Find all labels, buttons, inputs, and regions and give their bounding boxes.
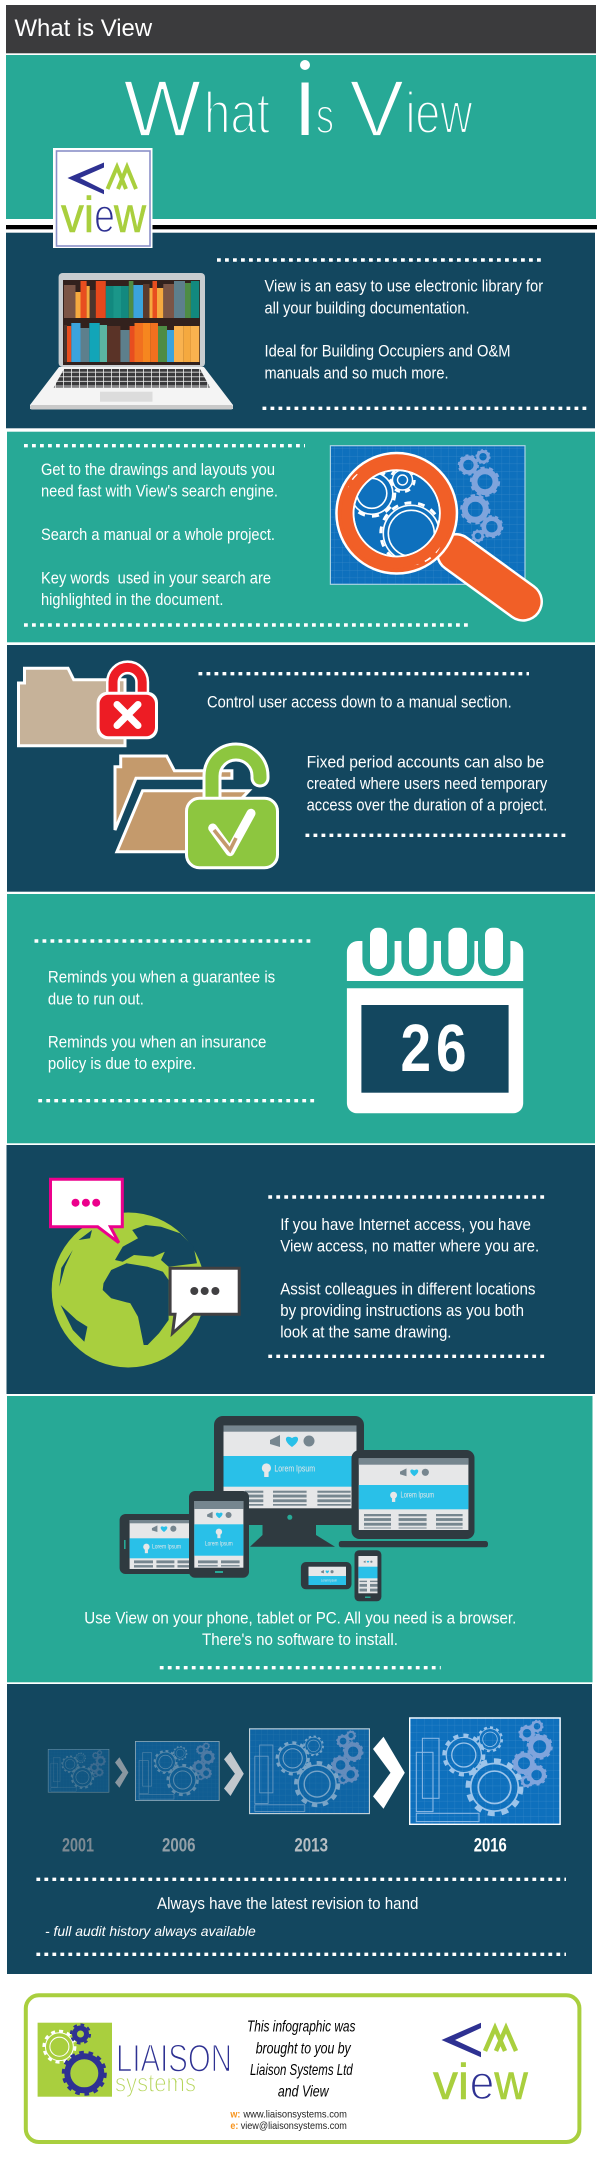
text block: credit: brought to you by: [256, 2040, 351, 2057]
text block: intro: [264, 277, 543, 382]
text block: latest revision: [45, 1894, 418, 1939]
panel: access control: [7, 645, 595, 892]
icon: desktop monitor: [214, 1416, 364, 1547]
text block: search: need fast with View's search engine.: [41, 482, 278, 501]
text block: search: highlighted in the document.: [41, 590, 223, 609]
text block: reminders: Reminds you when an insurance: [48, 1032, 266, 1051]
text block: latest revision: Always have the latest revision to hand: [157, 1894, 418, 1913]
heading: What Is View: hat: [204, 81, 270, 146]
text block: reminders: Reminds you when a guarantee is: [48, 968, 275, 987]
blueprint 2006: [135, 1741, 220, 1801]
text block: reminders: [48, 968, 275, 1073]
text block: latest revision: - full audit history always available: [45, 1923, 256, 1939]
text block: devices: There's no software to install.: [202, 1630, 398, 1649]
text block: search: Key words used in your search are: [41, 568, 271, 587]
panel: reminders: [7, 894, 595, 1143]
top title bar: [6, 5, 596, 53]
blueprint 2001: [48, 1749, 109, 1793]
year labels: 2016: [474, 1836, 507, 1857]
text block: internet access: Assist colleagues in different locations: [280, 1279, 536, 1298]
text block: access: created where users need temporary: [307, 774, 548, 793]
icon: pink speech bubble: [50, 1179, 122, 1243]
year labels: 2006: [162, 1836, 196, 1857]
arrow 2: [224, 1752, 244, 1796]
icon: locked folder: [18, 667, 158, 746]
icon: portrait phone: [354, 1550, 381, 1601]
heading: What Is View: s: [316, 88, 334, 144]
text block: credit: This infographic was: [247, 2019, 356, 2036]
text block: credit: Liaison Systems Ltd: [250, 2062, 353, 2079]
text block: access: Control user access down to a manual section.: [207, 693, 512, 712]
icon: laptop device: Lorem Ipsum: [400, 1490, 434, 1499]
icon: dark speech bubble: [170, 1268, 239, 1333]
text block: intro: Ideal for Building Occupiers and O&M: [264, 342, 510, 361]
text block: access: [207, 693, 548, 815]
logo: View: e: [470, 2057, 494, 2110]
icon: blueprint with magnifying glass: [330, 446, 525, 602]
logo: Liaison Systems: [38, 2023, 232, 2098]
text block: access: access over the duration of a project.: [307, 796, 547, 815]
icon: desktop monitor: Lorem Ipsum: [274, 1464, 315, 1475]
text block: access: Fixed period accounts can also be: [307, 752, 544, 771]
text block: reminders: due to run out.: [48, 989, 144, 1008]
panel: anywhere access: [6, 1145, 595, 1394]
blueprint 2013: [249, 1728, 370, 1814]
text block: internet access: by providing instructions as you both: [280, 1301, 524, 1320]
panel: footer: [26, 1995, 579, 2142]
text block: search: Search a manual or a whole project.: [41, 525, 275, 544]
logo: View badge: e: [94, 190, 115, 243]
text block: intro: all your building documentation.: [264, 298, 470, 317]
panel: revisions: [7, 1684, 592, 1974]
top title bar: What is View: [14, 15, 153, 42]
text block: intro: View is an easy to use electronic library for: [264, 277, 543, 296]
text block: reminders: policy is due to expire.: [48, 1054, 196, 1073]
arrow 1: [115, 1757, 128, 1788]
heading: What Is View: W: [124, 64, 201, 153]
logo: View badge: vi: [61, 187, 94, 243]
text block: internet access: If you have Internet access, you have: [280, 1215, 531, 1234]
text block: contact details: view@liaisonsystems.com: [241, 2120, 347, 2132]
logo: View: w: [493, 2054, 529, 2110]
icon: landscape tablet: Lorem Ipsum: [152, 1544, 181, 1551]
heading: What Is View: V: [350, 64, 405, 153]
text block: credit: [247, 2019, 356, 2101]
logo: View: [433, 2023, 529, 2110]
panel: devices: [7, 1396, 592, 1682]
year labels: 2001: [62, 1836, 94, 1857]
icon: laptop device: [339, 1450, 488, 1547]
text block: contact details: w:: [230, 2108, 240, 2120]
icon: landscape tablet: [120, 1514, 195, 1574]
logo: View badge: [53, 148, 152, 248]
icon: calendar: [347, 925, 523, 1113]
icon: portrait tablet: Lorem Ipsum: [205, 1541, 233, 1548]
icon: portrait tablet: [189, 1491, 249, 1578]
logo: View badge: w: [113, 187, 147, 243]
icon: landscape phone: [301, 1562, 352, 1589]
logo: Liaison Systems: LIAISON: [116, 2038, 232, 2081]
icon: landscape phone: Lorem Ipsum: [321, 1578, 337, 1582]
text block: devices: [84, 1608, 516, 1649]
icon: unlocked folder: [115, 752, 278, 868]
text block: contact details: e:: [230, 2120, 238, 2132]
year labels: 2013: [294, 1836, 328, 1857]
icon: calendar: 26: [400, 1011, 471, 1085]
text block: search: Get to the drawings and layouts you: [41, 460, 275, 479]
year labels: [62, 1836, 507, 1857]
text block: devices: Use View on your phone, tablet or PC. All you need is a browser.: [84, 1608, 516, 1627]
text block: credit: and View: [278, 2084, 330, 2101]
heading: What Is View: I: [294, 67, 316, 152]
text block: search: [41, 460, 278, 609]
text block: internet access: [280, 1215, 539, 1342]
heading: What Is View: iew: [406, 81, 473, 146]
text block: internet access: View access, no matter where you are.: [280, 1237, 539, 1256]
logo: Liaison Systems: systems: [115, 2068, 196, 2098]
text block: contact details: [230, 2108, 347, 2132]
text block: contact details: www.liaisonsystems.com: [243, 2108, 347, 2120]
heading: What Is View: [124, 60, 473, 153]
panel: header: [6, 55, 596, 219]
logo: View: vi: [433, 2054, 469, 2110]
panel: electronic library: [6, 233, 595, 428]
arrow 3: [373, 1737, 405, 1809]
blueprint 2016: [409, 1717, 561, 1825]
icon: globe: [52, 1212, 205, 1368]
text block: internet access: look at the same drawing.: [280, 1323, 452, 1342]
panel: search: [7, 432, 595, 642]
text block: intro: manuals and so much more.: [264, 363, 448, 382]
icon: laptop with bookshelf: [30, 273, 233, 410]
